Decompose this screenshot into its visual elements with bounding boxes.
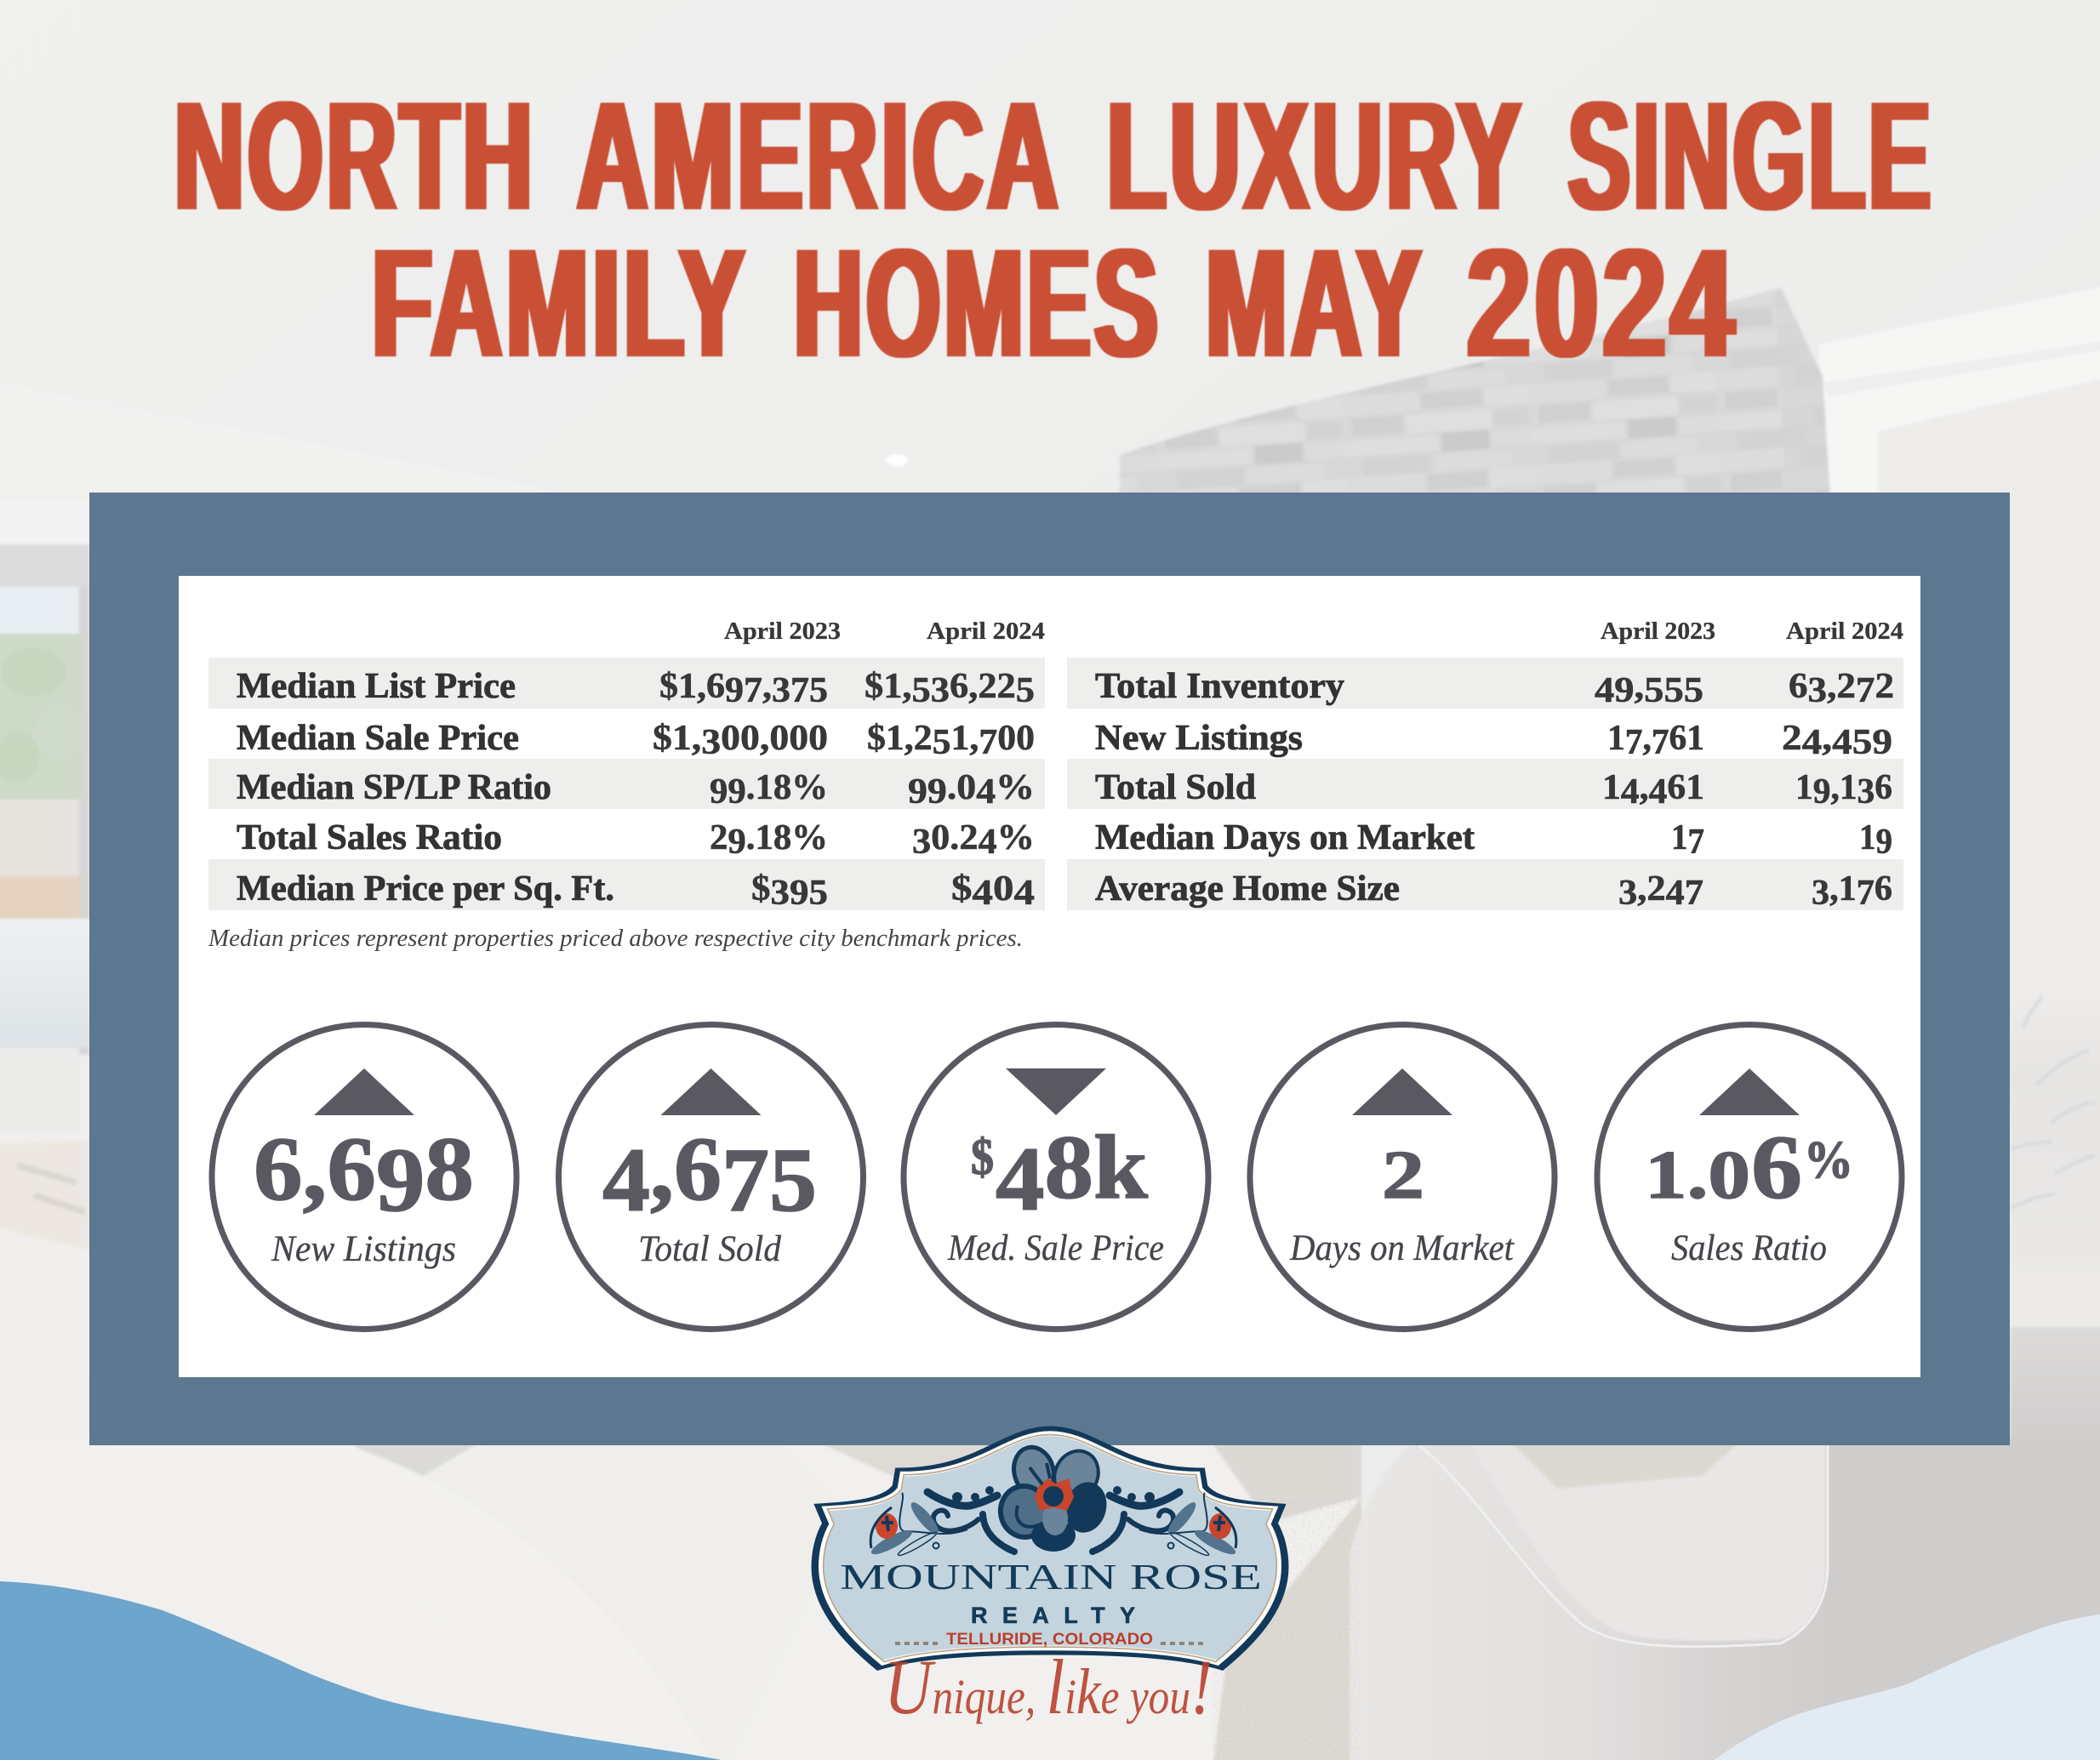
stat circle: Sales Ratio: 1.0 [1645, 1136, 1750, 1213]
row: Average Home Size [1067, 859, 1903, 913]
header: April 2023: April 2023 [1601, 618, 1715, 645]
title line 2: FAMILY [372, 216, 749, 390]
stat circle: Sales Ratio [1597, 1024, 1902, 1329]
stat circle: New Listings: 6,698 [254, 1119, 474, 1231]
logo shield [815, 1430, 1285, 1666]
title line 1: AMERICA [577, 69, 1062, 242]
row: Median SP/LP Ratio: 99.04% [908, 768, 1035, 812]
row: Median Sale Price: Median Sale Price [237, 719, 519, 758]
stat circle: Med. Sale Price: Med. Sale Price [947, 1228, 1164, 1268]
row: Median Days on Market: 19 [1859, 818, 1892, 862]
row: Median SP/LP Ratio: Median SP/LP Ratio [237, 768, 551, 807]
row: Median Sale Price [237, 719, 1035, 762]
row: Total Inventory: 49,555 [1595, 667, 1703, 710]
stat circle: Sales Ratio: 6 [1751, 1118, 1802, 1218]
stat circle: Days on Market: Days on Market [1289, 1228, 1515, 1268]
carpet texture and armchair piping [1213, 1445, 1828, 1760]
stat circle: Total Sold [558, 1024, 863, 1329]
stat circle: Total Sold: 4,675 [602, 1119, 817, 1231]
header: April 2024: April 2024 [1786, 618, 1903, 645]
title line 2 [372, 216, 1738, 390]
row: Total Sold: Total Sold [1095, 768, 1256, 807]
row: Median List Price: $1,536,225 [865, 667, 1035, 710]
row: Median Price per Sq. Ft. [208, 859, 1045, 913]
panel: slate blue frame [89, 493, 2010, 1445]
row: Average Home Size: Average Home Size [1095, 869, 1400, 908]
window with trees and fence [0, 502, 89, 1055]
row: Total Sales Ratio: Total Sales Ratio [237, 818, 502, 857]
title line 2: MAY [1206, 216, 1425, 390]
logo dotted flourishes [895, 1642, 1207, 1645]
row: Median Days on Market: Median Days on Market [1095, 818, 1475, 857]
row: New Listings: New Listings [1095, 719, 1303, 758]
stat circle: New Listings: New Listings [271, 1229, 456, 1269]
footnote: Median prices represent properties priced above respective city benchmark prices. [208, 926, 1023, 952]
logo rose flower [996, 1443, 1112, 1552]
row: Total Inventory: Total Inventory [1095, 667, 1344, 706]
row: Average Home Size: 3,176 [1812, 869, 1892, 913]
table lamp [0, 919, 89, 1133]
header: April 2024: April 2024 [927, 618, 1045, 645]
row: Median Sale Price: $1,251,700 [867, 719, 1035, 762]
logo: Mountain Rose Realty badge [815, 1430, 1285, 1730]
stat circle: Total Sold: Total Sold [638, 1229, 781, 1269]
stat circle: Med. Sale Price: 48k [996, 1118, 1149, 1230]
title line 2: HOMES [794, 216, 1161, 390]
stat circle: Med. Sale Price: $ [971, 1129, 994, 1185]
logo scroll ornaments [869, 1486, 1238, 1558]
bottom-left blue wave [0, 1581, 722, 1760]
recessed ceiling light [886, 454, 908, 466]
title [174, 69, 1934, 390]
row: Total Inventory [1067, 658, 1903, 710]
right background behind armchair [1821, 1438, 2100, 1760]
row: Median Days on Market: 17 [1671, 818, 1704, 862]
tufted headboard [2010, 991, 2100, 1446]
row: New Listings: 17,761 [1607, 719, 1704, 762]
stone fireplace [1120, 288, 1830, 498]
row: Median Days on Market [1095, 818, 1892, 862]
title line 1 [174, 69, 1934, 242]
row: Median Price per Sq. Ft.: $395 [751, 869, 828, 913]
stat circle: Med. Sale Price [904, 1024, 1208, 1329]
row: Total Sold: 14,461 [1602, 768, 1704, 812]
armchair [1350, 1438, 1829, 1760]
row: Median SP/LP Ratio: 99.18% [710, 768, 828, 812]
stat circle: Sales Ratio: Sales Ratio [1671, 1228, 1827, 1268]
stat circle: Days on Market [1250, 1024, 1555, 1329]
row: New Listings: 24,459 [1782, 719, 1892, 762]
row: Median List Price: $1,697,375 [659, 667, 828, 710]
logo location: TELLURIDE, COLORADO [946, 1631, 1153, 1649]
row: Total Sold [1067, 759, 1903, 812]
stat circle: Sales Ratio: % [1804, 1131, 1853, 1189]
logo wordmark: MOUNTAIN ROSE [840, 1558, 1262, 1598]
row: Total Sales Ratio: 29.18% [710, 818, 828, 862]
title line 1: NORTH [174, 69, 536, 242]
row: Average Home Size: 3,247 [1618, 869, 1703, 913]
panel: white data card [179, 576, 1920, 1377]
row: Median SP/LP Ratio [208, 759, 1045, 812]
row: Median List Price: Median List Price [237, 667, 516, 706]
row: New Listings [1095, 719, 1892, 762]
title line 2: 2024 [1467, 216, 1738, 390]
row: Total Inventory: 63,272 [1789, 667, 1894, 710]
logo sub-wordmark: REALTY [971, 1603, 1135, 1628]
carpet [808, 1438, 1361, 1760]
row: Total Sales Ratio: 30.24% [912, 818, 1035, 862]
row: Median Price per Sq. Ft.: Median Price per Sq. Ft. [237, 869, 614, 908]
sofa and throw pillow [0, 1131, 89, 1591]
stat circle: New Listings [212, 1024, 516, 1329]
stat circle: Days on Market: 2 [1382, 1136, 1424, 1213]
row: Median Price per Sq. Ft.: $404 [951, 869, 1035, 913]
crown molding and door frame [1818, 285, 2100, 1760]
lower sofa cushions [0, 1438, 1361, 1760]
row: Median List Price [208, 658, 1045, 710]
row: Median Sale Price: $1,300,000 [653, 719, 828, 762]
logo tagline script: Unique, like you! [884, 1643, 1213, 1730]
bottom-right pale wave [1715, 1615, 2100, 1760]
row: Total Sold: 19,136 [1795, 768, 1892, 812]
table: right volume metrics [1067, 618, 1903, 913]
header: April 2023: April 2023 [724, 618, 841, 645]
table: left price metrics [208, 618, 1045, 952]
title line 1: LUXURY [1107, 69, 1525, 242]
row: Total Sales Ratio [237, 818, 1035, 862]
